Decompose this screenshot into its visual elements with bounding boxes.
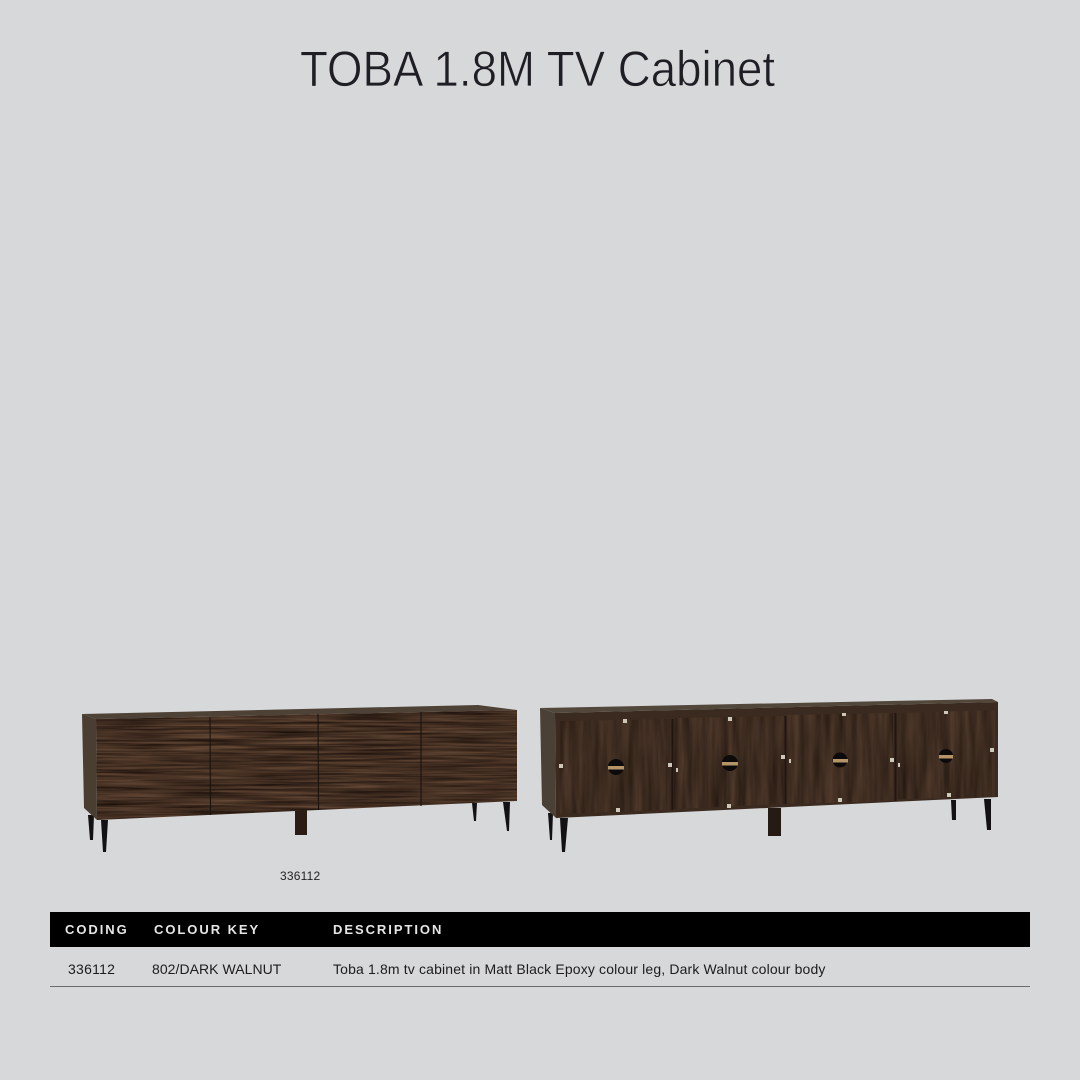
centre leg front xyxy=(295,809,307,835)
table header bar xyxy=(50,912,1030,947)
header: colour key: COLOUR KEY xyxy=(154,922,260,937)
cell: code: 336112 xyxy=(68,961,115,977)
side edge xyxy=(540,708,556,818)
top panel xyxy=(82,705,517,719)
back view cabinet xyxy=(540,699,998,852)
table xyxy=(50,912,1030,987)
product images xyxy=(82,699,998,852)
cable holes xyxy=(608,749,953,775)
product code caption: 336112 xyxy=(280,869,320,883)
ribbed door fronts xyxy=(96,710,517,820)
front legs xyxy=(88,802,510,852)
front view cabinet xyxy=(82,705,517,852)
header: coding: CODING xyxy=(65,922,129,937)
door gaps xyxy=(210,712,421,815)
centre leg back xyxy=(768,808,781,836)
top edge xyxy=(540,699,998,713)
back legs xyxy=(548,799,991,852)
fixing clips xyxy=(559,711,994,812)
cell: colour: 802/DARK WALNUT xyxy=(152,961,281,977)
carcass frame xyxy=(555,702,998,818)
header: description: DESCRIPTION xyxy=(333,922,443,937)
cell: description: Toba 1.8m tv cabinet in Matt Black Epoxy colour leg, Dark Walnut colour body xyxy=(333,961,826,977)
back panels xyxy=(558,710,995,814)
row divider xyxy=(50,986,1030,987)
panel gaps xyxy=(672,713,896,810)
side panel xyxy=(82,714,97,820)
